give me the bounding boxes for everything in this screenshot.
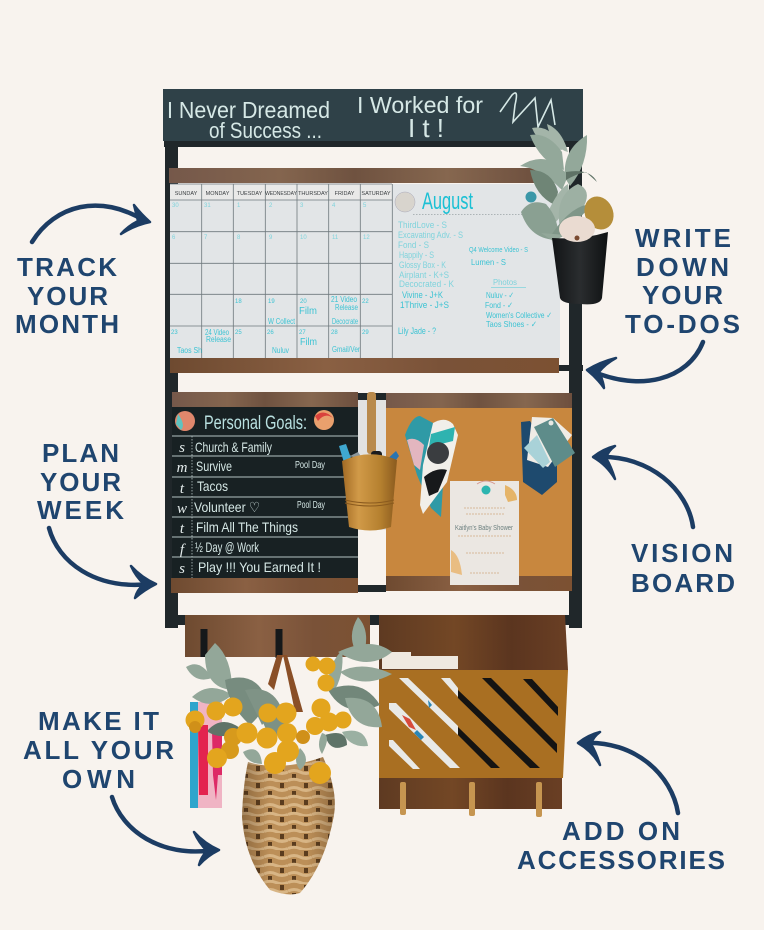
- weekly goals text: [194, 439, 325, 575]
- diagonal slots: [389, 678, 558, 769]
- weekday headers: [175, 191, 391, 197]
- calendar handwritten entries: Decocrate: [332, 317, 358, 326]
- to-do list left column: Decocrated - K: [399, 279, 454, 289]
- white divider panel: [358, 400, 386, 530]
- to-do list left column: Lily Jade - ?: [398, 326, 436, 336]
- calendar dates: 5: [363, 203, 367, 209]
- pinned teal brochure: [405, 416, 443, 517]
- panel: cork vision board: [386, 393, 575, 591]
- August heading: August: [422, 188, 473, 215]
- weekday initials: [177, 440, 188, 577]
- weekly goals text: Pool Day: [295, 460, 325, 471]
- icon: magnet left: [175, 411, 195, 431]
- calendar handwritten entries: Film: [300, 337, 317, 348]
- bucket body: [342, 454, 397, 530]
- to-do list right column: Q4 Welcome Video - S: [469, 245, 528, 254]
- weekday initials: t: [180, 521, 185, 537]
- to-do list left column: Vivine - J+K: [402, 290, 443, 300]
- calendar dates: 11: [332, 235, 339, 241]
- arrow: to whiteboard: [587, 342, 703, 388]
- calendar handwritten entries: 20: [300, 299, 307, 305]
- calendar dates: 7: [204, 235, 208, 241]
- papers in organizer: [382, 652, 458, 669]
- calendar handwritten entries: 23: [171, 330, 178, 336]
- to-do list left column: Excavating Adv. - S: [398, 230, 463, 240]
- weekday initials: f: [180, 542, 186, 558]
- weekday initials: s: [179, 561, 185, 577]
- calendar handwritten entries: [171, 295, 369, 355]
- label: vision board: [631, 538, 735, 598]
- label: track your month: [15, 252, 119, 339]
- calendar handwritten entries: 29: [362, 330, 369, 336]
- to-do list right column: Women's Collective ✓: [486, 310, 552, 320]
- black bucket with plant: [520, 124, 619, 304]
- weekday headers: TUESDAY: [237, 191, 263, 197]
- to-do list right column: Nuluv - ✓: [486, 290, 514, 300]
- calendar handwritten entries: Film: [299, 306, 317, 317]
- basket shading: [242, 757, 335, 894]
- header slogan right: It!: [408, 113, 444, 143]
- label: add on accessories: [517, 816, 725, 875]
- label: track your month: YOUR: [27, 281, 108, 311]
- label: make it all your own: OWN: [62, 764, 135, 794]
- bucket body: [552, 232, 608, 304]
- weekday initials: s: [179, 440, 185, 456]
- wood trim: cork bottom: [386, 576, 572, 591]
- calendar handwritten entries: 21 Video: [331, 295, 357, 304]
- icon: teal magnet: [526, 192, 536, 202]
- calendar dates: 30: [172, 203, 179, 209]
- weekly goals text: Church & Family: [195, 439, 272, 455]
- header slogan left: of Success ...: [209, 118, 322, 143]
- label: vision board: BOARD: [631, 568, 735, 598]
- baby shower invitation: [450, 481, 519, 585]
- to-do list left column: Glossy Box - K: [399, 260, 446, 270]
- chalk scribble: [500, 93, 555, 127]
- markers: [339, 444, 399, 470]
- calendar dates: 31: [204, 203, 211, 209]
- wood trim: chalkboard bottom: [171, 578, 358, 593]
- weekday initials: m: [177, 460, 188, 476]
- label: plan your week: [37, 438, 124, 525]
- label: track your month: MONTH: [15, 309, 119, 339]
- weekly goals text: Film All The Things: [196, 519, 298, 535]
- chalkboard header sign: [163, 89, 583, 143]
- calendar dates: 12: [363, 235, 370, 241]
- calendar handwritten entries: Nuluv: [272, 346, 289, 355]
- weekday headers: SATURDAY: [361, 191, 391, 197]
- white pumpkin: [559, 216, 595, 242]
- to-do list right column: Taos Shoes - ✓: [486, 319, 537, 329]
- weekday headers: FRIDAY: [335, 191, 355, 197]
- to-do list left column: ThirdLove - S: [398, 220, 447, 230]
- calendar handwritten entries: Gmail/Ver: [332, 345, 360, 354]
- heading: personal goals: Personal Goals:: [204, 413, 307, 434]
- calendar handwritten entries: Taos Sh: [177, 346, 202, 355]
- to-do list left column: Airplant - K+S: [399, 270, 449, 280]
- label: add on accessories: ACCESSORIES: [517, 845, 725, 875]
- arrow: to basket: [112, 797, 219, 865]
- arrow: to calendar: [32, 205, 150, 242]
- label: make it all your own: ALL YOUR: [23, 735, 174, 765]
- gold peg hooks: [400, 782, 542, 817]
- weekday initials: w: [177, 501, 187, 517]
- patterned towel: [190, 702, 222, 808]
- weekly goals text: ½ Day @ Work: [195, 539, 260, 555]
- to-do list left column: Happily - S: [399, 250, 434, 260]
- label: plan your week: WEEK: [37, 495, 124, 525]
- wood trim: cork top: [386, 393, 572, 408]
- calendar handwritten entries: 28: [331, 330, 338, 336]
- calendar handwritten entries: 22: [362, 299, 369, 305]
- leather straps: [268, 655, 303, 712]
- calendar dates: 2: [269, 203, 273, 209]
- calendar dates: 4: [332, 203, 336, 209]
- squash: [579, 192, 619, 234]
- weekday headers: MONDAY: [206, 191, 230, 197]
- calendar dates: 3: [300, 203, 304, 209]
- gold bucket with markers: [339, 392, 399, 530]
- calendar dates: [172, 203, 370, 241]
- calendar handwritten entries: 18: [235, 299, 242, 305]
- header slogan right: I Worked for: [357, 92, 483, 118]
- weekday headers: WEDNESDAY: [265, 191, 298, 197]
- bucket handle: [367, 392, 376, 454]
- label: add on accessories: ADD ON: [562, 816, 680, 846]
- to-do list left column: 1Thrive - J+S: [400, 300, 449, 310]
- weekly goals text: Tacos: [197, 478, 228, 494]
- to-do list right column: [469, 245, 552, 329]
- label: plan your week: PLAN: [42, 438, 119, 468]
- weekly goals text: Pool Day: [297, 500, 325, 511]
- header slogan left: [167, 97, 330, 143]
- label: write down your to-dos: DOWN: [636, 252, 729, 282]
- calendar handwritten entries: 27: [299, 330, 306, 336]
- woven basket with bouquet: [186, 617, 392, 894]
- label: write down your to-dos: WRITE: [635, 223, 731, 253]
- label: write down your to-dos: [625, 223, 740, 339]
- weekly goals text: Survive: [196, 458, 232, 474]
- arrow: to chalkboard: [49, 528, 156, 598]
- bouquet yellow blooms: [186, 656, 352, 784]
- arrow: to mail organizer: [578, 732, 678, 813]
- calendar handwritten entries: 19: [268, 299, 275, 305]
- organizer back panel: [379, 615, 568, 670]
- mail organizer: [379, 615, 568, 817]
- gold front panel: [379, 670, 568, 778]
- to-do list right column: Lumen - S: [471, 257, 506, 267]
- to-do list right column: Fond - ✓: [485, 300, 513, 310]
- weekday initials: t: [180, 481, 185, 497]
- arrow: to cork board: [593, 446, 693, 527]
- calendar dates: 10: [300, 235, 307, 241]
- calendar handwritten entries: W Collect: [268, 317, 296, 326]
- basket: [242, 757, 335, 894]
- calendar dates: 8: [237, 235, 241, 241]
- wood trim: calendar top: [169, 168, 540, 183]
- panel: monthly calendar whiteboard: [170, 184, 560, 358]
- icon: magnet right: [314, 410, 334, 430]
- label: track your month: TRACK: [17, 252, 117, 282]
- label: plan your week: YOUR: [40, 467, 121, 497]
- label: make it all your own: [23, 706, 174, 794]
- label: write down your to-dos: YOUR: [642, 280, 723, 310]
- to-do list left column: [398, 220, 463, 336]
- calendar handwritten entries: 25: [235, 330, 242, 336]
- pinned white brochure: [420, 420, 458, 514]
- panel: weekly chalkboard: [172, 407, 358, 578]
- calendar dates: 6: [172, 235, 176, 241]
- plant leaves: [520, 124, 597, 241]
- chalk lines: [172, 436, 358, 557]
- calendar handwritten entries: 24 Video: [205, 328, 229, 337]
- header slogan left: I Never Dreamed: [167, 97, 330, 123]
- paint swatches: [521, 417, 575, 495]
- icon: round magnet: [395, 192, 415, 212]
- calendar handwritten entries: 26: [267, 330, 274, 336]
- header slogan right: [357, 92, 483, 143]
- calendar dates: 9: [269, 235, 273, 241]
- hook rail: [185, 615, 370, 658]
- wood trim: calendar bottom: [170, 358, 559, 373]
- metal frame: [164, 141, 583, 628]
- label: vision board: VISION: [631, 538, 733, 568]
- wood trim: chalkboard top: [172, 392, 358, 407]
- label: write down your to-dos: TO-DOS: [625, 309, 740, 339]
- weekday headers: SUNDAY: [175, 191, 198, 197]
- to-do list right column: Photos: [493, 277, 517, 287]
- weekday headers: THURSDAY: [298, 191, 328, 197]
- baby shower invitation: Kaitlyn's Baby Shower: [455, 525, 514, 532]
- weekly goals text: Volunteer ♡: [194, 499, 260, 515]
- calendar handwritten entries: Release: [206, 335, 231, 344]
- calendar dates: 1: [237, 203, 241, 209]
- icon: black hooks: [204, 629, 279, 658]
- weekly goals text: Play !!! You Earned It !: [198, 559, 321, 575]
- to-do list left column: Fond - S: [398, 240, 429, 250]
- calendar grid: [170, 184, 392, 358]
- label: make it all your own: MAKE IT: [38, 706, 159, 736]
- calendar handwritten entries: Release: [335, 303, 358, 312]
- lower wood panel: [379, 778, 562, 809]
- bouquet leaves: [186, 617, 392, 770]
